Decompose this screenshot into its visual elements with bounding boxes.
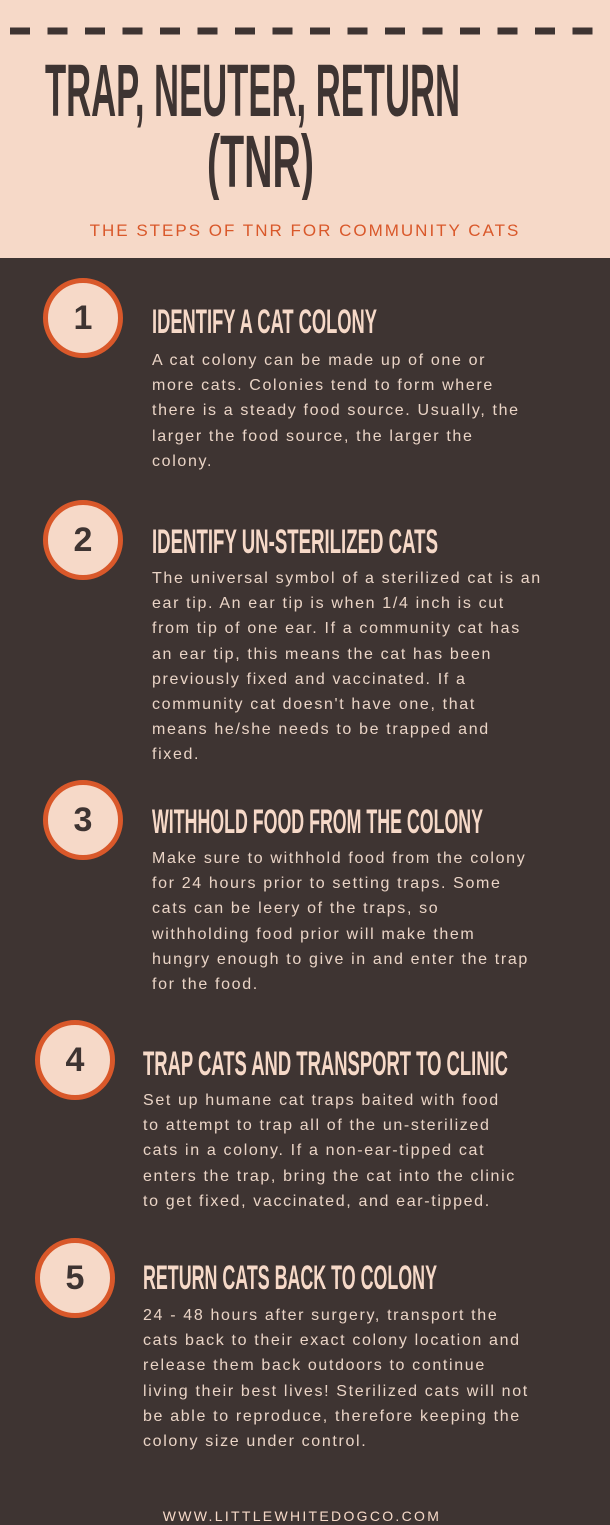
body 1: colony. (152, 453, 213, 470)
body 5: 24 - 48 hours after surgery, transport the (143, 1307, 498, 1324)
number circle 5 (35, 1238, 115, 1318)
number circle 1 (43, 278, 123, 358)
subtitle: THE STEPS OF TNR FOR COMMUNITY CATS (90, 221, 520, 240)
body 2: means he/she needs to be trapped and (152, 721, 490, 738)
body 3: for 24 hours prior to setting traps. Some (152, 875, 502, 892)
body 4 (143, 1092, 516, 1210)
body 1: more cats. Colonies tend to form where (152, 377, 494, 394)
body 5: release them back outdoors to continue (143, 1357, 486, 1374)
body 5: be able to reproduce, therefore keeping the (143, 1408, 521, 1425)
body 5: colony size under control. (143, 1433, 367, 1450)
header panel (0, 0, 610, 258)
number circle 2: 2 (74, 521, 92, 559)
body 3: for the food. (152, 976, 259, 993)
step 2 (43, 500, 542, 763)
body 3: withholding food prior will make them (152, 926, 475, 943)
number circle 4: 4 (66, 1041, 84, 1079)
number circle 2 (43, 500, 123, 580)
body 5 (143, 1307, 529, 1450)
number circle 3 (43, 780, 123, 860)
dashed line (10, 28, 592, 34)
body 2 (152, 570, 542, 763)
step 5 (35, 1238, 529, 1450)
footer url: WWW.LITTLEWHITEDOGCO.COM (163, 1508, 441, 1524)
heading 1: IDENTIFY A CAT COLONY (152, 303, 377, 340)
number circle 1: 1 (74, 299, 92, 337)
body 4: to attempt to trap all of the un-sterilized (143, 1117, 491, 1134)
body 5: cats back to their exact colony location and (143, 1332, 521, 1349)
body 1: A cat colony can be made up of one or (152, 352, 486, 369)
number circle 3: 3 (74, 801, 92, 839)
step 4 (35, 1020, 516, 1210)
body 5: living their best lives! Sterilized cats will not (143, 1383, 529, 1400)
step 3 (43, 780, 529, 993)
body 4: cats in a colony. If a non-ear-tipped cat (143, 1142, 485, 1159)
title (45, 49, 460, 200)
body 3 (152, 850, 529, 993)
body 2: ear tip. An ear tip is when 1/4 inch is cut (152, 595, 505, 612)
body 1: larger the food source, the larger the (152, 428, 474, 445)
body 1 (152, 352, 520, 470)
body 3: cats can be leery of the traps, so (152, 900, 439, 917)
body 2: an ear tip, this means the cat has been (152, 646, 492, 663)
body 4: enters the trap, bring the cat into the clinic (143, 1168, 516, 1185)
body 2: fixed. (152, 746, 200, 763)
step 1 (43, 278, 520, 470)
body 2: The universal symbol of a sterilized cat is an (152, 570, 542, 587)
body 2: community cat doesn't have one, that (152, 696, 476, 713)
body 2: from tip of one ear. If a community cat has (152, 620, 521, 637)
body 2: previously fixed and vaccinated. If a (152, 671, 467, 688)
body 4: Set up humane cat traps baited with food (143, 1092, 500, 1109)
body 3: Make sure to withhold food from the colony (152, 850, 526, 867)
number circle 5: 5 (66, 1259, 84, 1297)
number circle 4 (35, 1020, 115, 1100)
body 3: hungry enough to give in and enter the trap (152, 951, 529, 968)
body 1: there is a steady food source. Usually, the (152, 402, 520, 419)
body 4: to get fixed, vaccinated, and ear-tipped. (143, 1193, 491, 1210)
